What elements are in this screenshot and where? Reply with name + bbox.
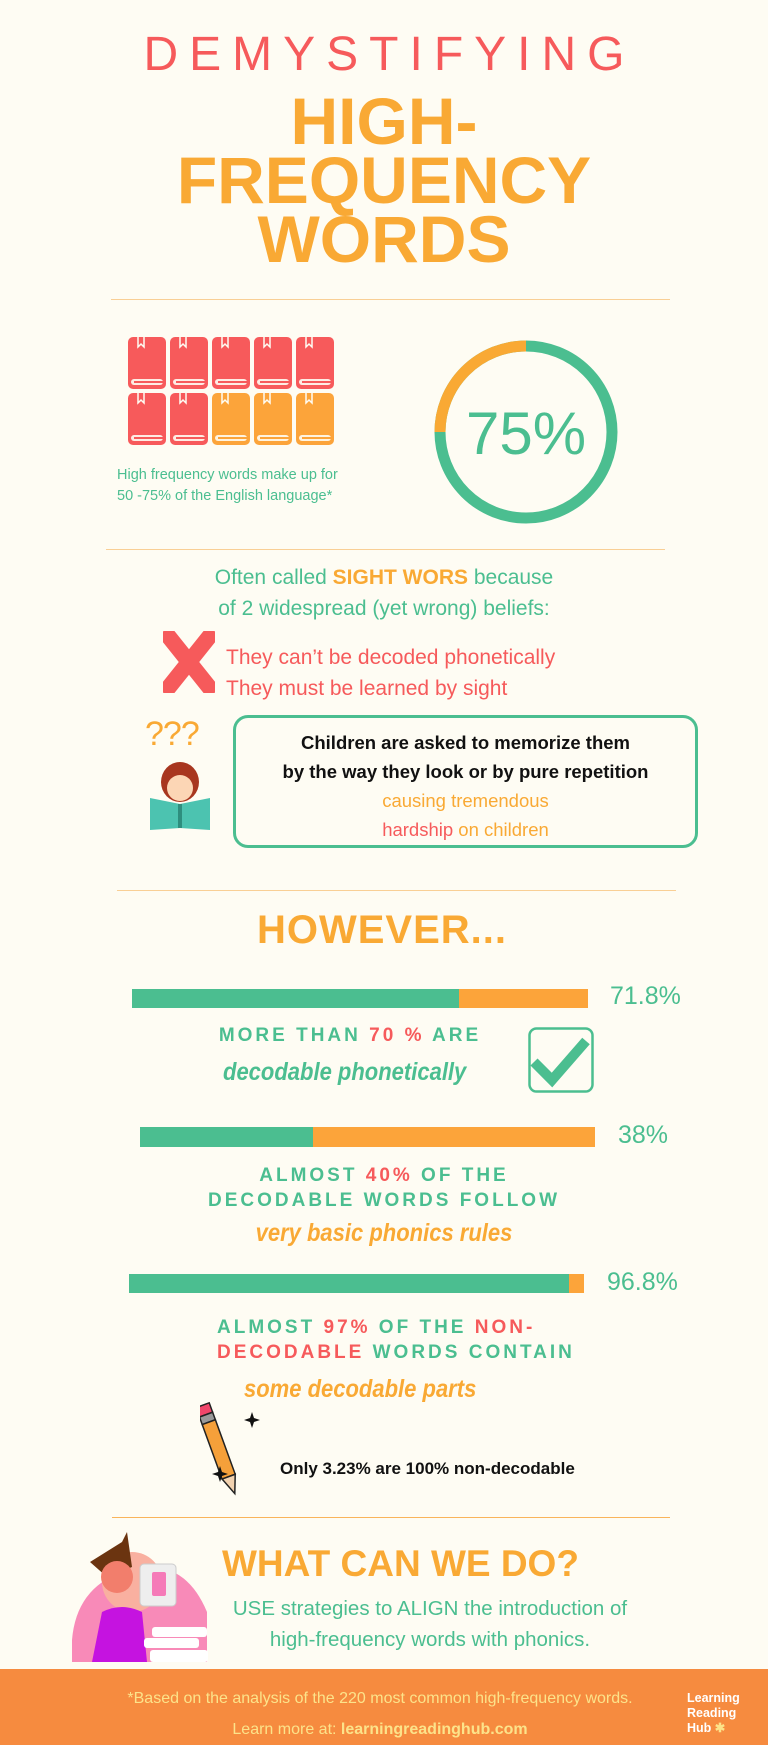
footer text xyxy=(127,1690,633,1738)
text: decodable phonetically: decodable phonetically xyxy=(223,1058,466,1086)
text: wrong beliefs: They must be learned by sight xyxy=(226,677,507,700)
callout box: memorize: Children are asked to memorize them xyxy=(301,732,630,753)
text: almost 40%: ALMOST 40% OF THE xyxy=(259,1165,509,1186)
donut label: 75% xyxy=(466,400,586,467)
title main: high-frequency words xyxy=(177,84,591,276)
caption: high frequency words share xyxy=(117,467,338,504)
callout box: memorize xyxy=(233,715,698,848)
text: almost 40% xyxy=(208,1165,560,1211)
title line: demystifying: DEMYSTIFYING xyxy=(143,28,636,81)
text: sight words intro: of 2 widespread (yet wrong) beliefs: xyxy=(218,597,550,620)
heading: what can we do: WHAT CAN WE DO? xyxy=(222,1543,579,1584)
text: wrong beliefs: They can’t be decoded phonetically xyxy=(226,646,555,669)
icon: checkbox xyxy=(528,1027,594,1093)
title main: high-frequency words: HIGH- xyxy=(290,84,477,158)
chart: 75% donut xyxy=(434,340,618,524)
logo: Learning xyxy=(687,1691,740,1705)
text: use strategies xyxy=(233,1597,628,1651)
footer text: Learn more at: learningreadinghub.com xyxy=(232,1721,528,1738)
text: more than 70%: MORE THAN 70 % ARE xyxy=(219,1025,481,1046)
callout box: memorize: hardship on children xyxy=(382,819,549,840)
icon: girl reading xyxy=(150,762,210,830)
illustration: boy with tablet xyxy=(72,1532,208,1662)
bar chart 2: 38% xyxy=(140,1121,668,1149)
value label: 96.8% xyxy=(607,1268,678,1296)
text: very basic phonics rules: very basic phonics rules xyxy=(256,1219,512,1247)
value label: 71.8% xyxy=(610,982,681,1010)
title main: high-frequency words: WORDS xyxy=(258,202,510,276)
text: wrong beliefs xyxy=(226,646,556,700)
text: almost 40%: DECODABLE WORDS FOLLOW xyxy=(208,1190,560,1211)
caption: high frequency words share: 50 -75% of the English language* xyxy=(117,488,332,504)
text: some decodable parts: some decodable parts xyxy=(244,1375,476,1403)
heading: however: HOWEVER... xyxy=(257,908,507,952)
text: use strategies: USE strategies to ALIGN the introduction of xyxy=(233,1597,627,1620)
title xyxy=(143,28,636,276)
logo xyxy=(687,1691,740,1735)
callout box: memorize: causing tremendous xyxy=(382,790,549,811)
text: almost 97% xyxy=(217,1317,575,1363)
text: almost 97%: ALMOST 97% OF THE NON- xyxy=(217,1317,535,1338)
value label: 38% xyxy=(618,1121,668,1149)
logo: Hub ✱ xyxy=(687,1721,725,1735)
bar chart 1: 71.8% xyxy=(132,982,681,1010)
text: sight words intro xyxy=(215,566,553,620)
icon: books grid xyxy=(128,337,334,445)
logo: Reading xyxy=(687,1706,736,1720)
callout box: memorize: by the way they look or by pure repetition xyxy=(283,761,648,782)
caption: high frequency words share: High frequency words make up for xyxy=(117,467,338,483)
icon: question marks: ??? xyxy=(145,715,199,753)
text: only 3.23%: Only 3.23% are 100% non-decodable xyxy=(280,1459,575,1478)
text: use strategies: high-frequency words with phonics. xyxy=(270,1628,590,1651)
text: almost 97%: DECODABLE WORDS CONTAIN xyxy=(217,1342,575,1363)
text: sight words intro: Often called SIGHT WORS because xyxy=(215,566,553,589)
footer text: *Based on the analysis of the 220 most common high-frequency words. xyxy=(127,1690,633,1707)
icon: pencil with sparkles xyxy=(200,1402,260,1496)
icon: red X xyxy=(163,631,215,693)
title main: high-frequency words: FREQUENCY xyxy=(177,143,591,217)
footer xyxy=(0,1669,768,1745)
bar chart 3: 96.8% xyxy=(129,1268,678,1296)
